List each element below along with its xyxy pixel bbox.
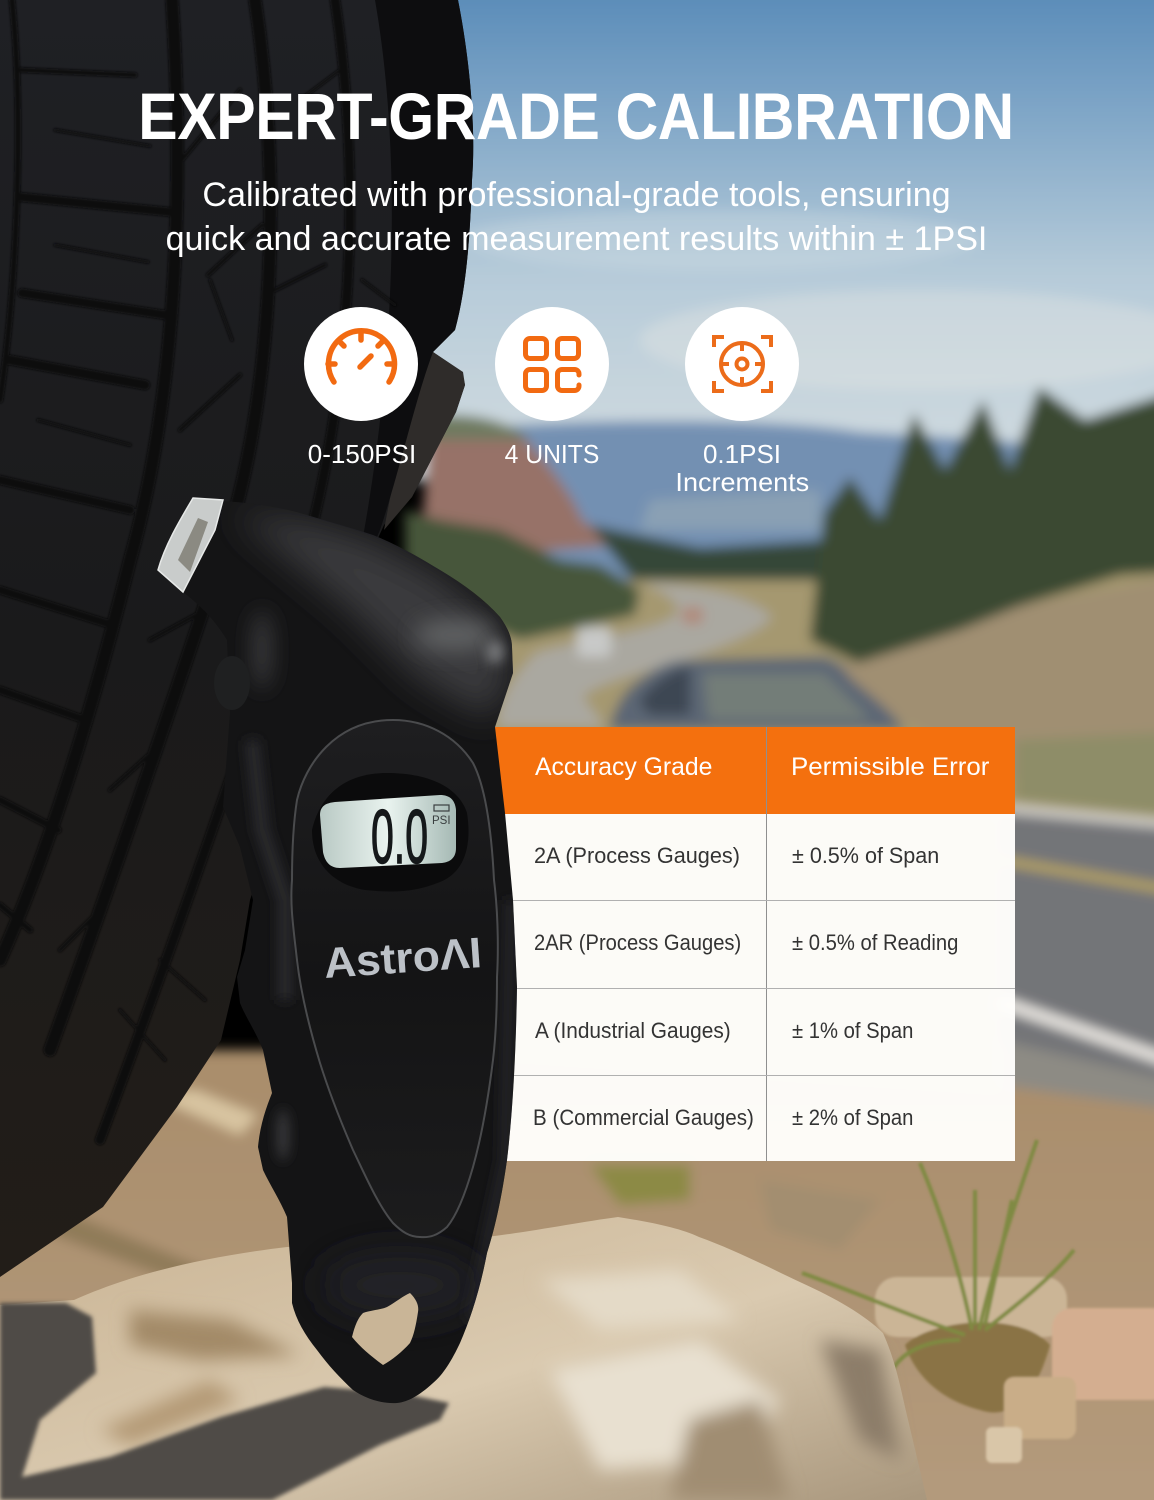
ground [420,560,1154,1200]
gauge nozzle [158,498,223,592]
gauge unit: PSI [432,815,451,827]
hillside [790,570,1154,790]
highway [497,583,772,727]
dark tree line [590,525,830,615]
icon: speedometer [304,307,418,421]
label: range: 0-150PSI [308,439,416,469]
right road [1000,806,1154,1120]
gauge face panel [291,720,498,1237]
foreground dirt [0,1050,1154,1500]
table rows: ± 0.5% of Reading [792,930,958,954]
gauge button [214,656,250,710]
tire gauge device [157,497,517,1404]
gauge logo: AstroΛI [322,929,483,988]
distant hills [420,421,1154,620]
table header [494,727,1015,814]
table rows: B (Commercial Gauges) [533,1104,754,1130]
table rows: ± 0.5% of Span [792,842,939,868]
gauge display recess [312,773,469,891]
car [609,657,905,730]
label: increments: 0.1PSI [703,439,781,469]
table: accuracy grades [495,727,1015,1161]
gauge hole [352,1293,418,1365]
gauge reading: 0.0 [371,795,428,880]
subtitle: Calibrated with professional-grade tools, ensuring [202,176,951,214]
subtitle: quick and accurate measurement results within ± 1PSI [166,220,987,258]
table body background [494,814,1015,1161]
table header: Permissible Error [791,753,989,781]
mesa [420,415,620,560]
icon: target [685,307,799,421]
subtitle [166,176,987,258]
distant cars [577,627,611,657]
right trees [810,380,1154,663]
shoulder [350,0,473,600]
tire [0,0,473,1277]
table rows: ± 2% of Span [792,1104,913,1130]
title: EXPERT-GRADE CALIBRATION [138,79,1014,153]
plant and stones [802,1140,1154,1463]
table rows: ± 1% of Span [792,1018,913,1042]
mudguard [384,350,465,530]
table rows: 2AR (Process Gauges) [534,930,741,954]
label: increments [675,439,809,497]
gauge body [216,501,517,1404]
table rows: 2A (Process Gauges) [534,842,740,868]
gauge LCD [320,795,456,868]
table rows: A (Industrial Gauges) [535,1018,731,1042]
label: units: 4 UNITS [505,439,599,469]
rock shadow [0,1303,449,1500]
icon: four units [495,307,609,421]
table rows [533,842,958,1130]
table header: Accuracy Grade [535,753,712,781]
label: increments: Increments [675,467,809,497]
tread grooves [0,0,395,1140]
left trees [405,510,640,640]
rock [0,1217,927,1500]
